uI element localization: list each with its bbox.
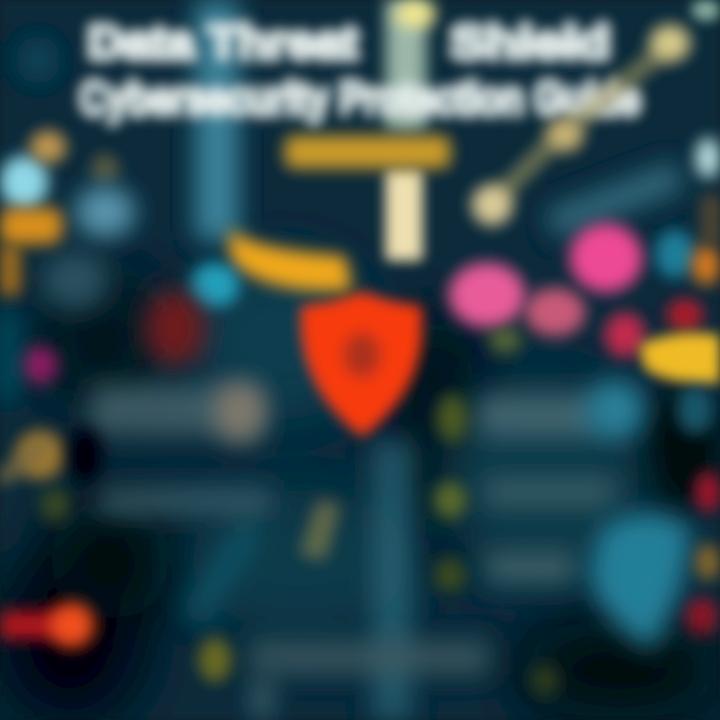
icon: central red shield (302, 292, 421, 436)
left text panel (0, 382, 270, 521)
orange ribbon (145, 228, 352, 366)
left icon cluster (0, 36, 135, 400)
top right network nodes (472, 0, 720, 225)
bottom text block (199, 638, 559, 720)
right text panel (434, 380, 720, 650)
right pink and yellow cluster (449, 195, 720, 382)
title: Data Threat (88, 16, 358, 68)
vertical light beams (180, 0, 435, 720)
subtitle badge (285, 136, 450, 168)
title (80, 16, 640, 124)
title: Shield (450, 16, 610, 68)
bottom left red pill (0, 603, 94, 647)
